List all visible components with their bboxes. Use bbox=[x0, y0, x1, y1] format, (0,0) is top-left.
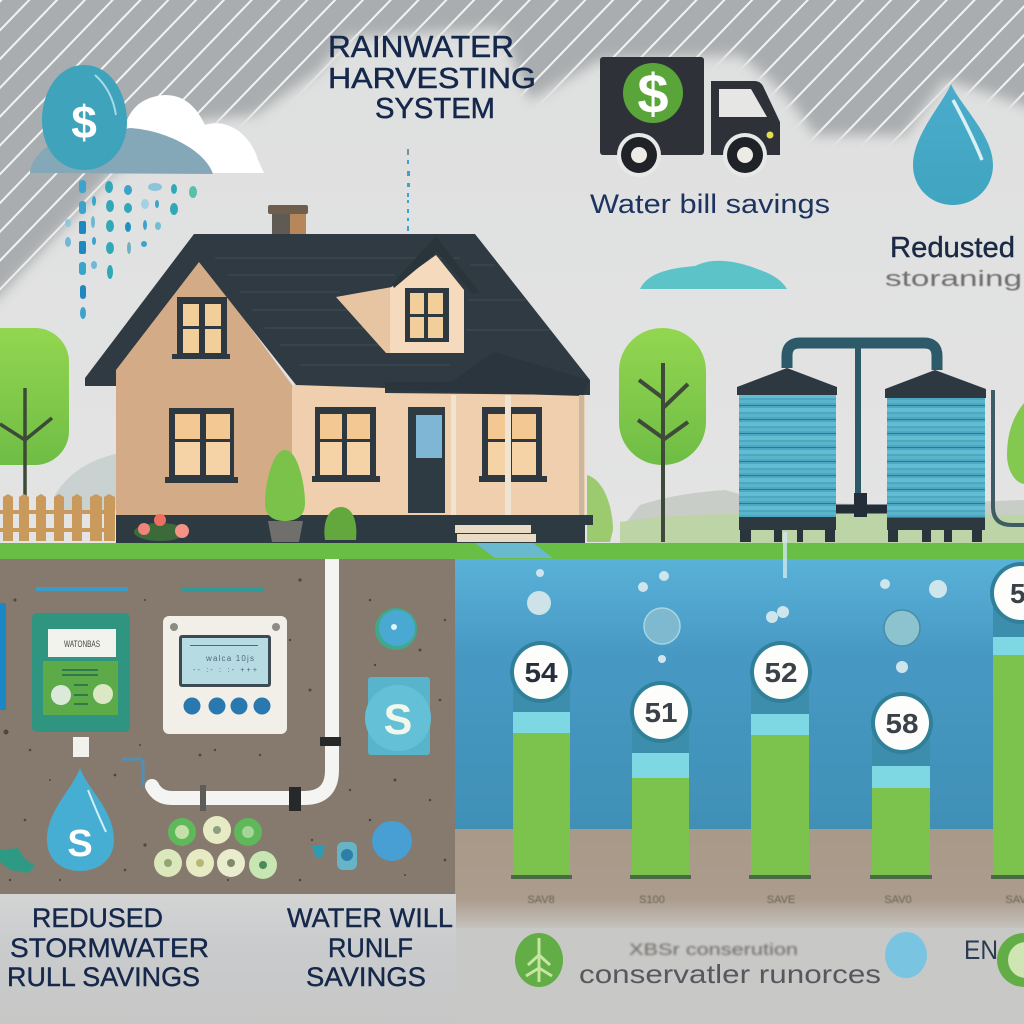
trickle from tank bbox=[783, 532, 787, 578]
legend: conservation: XBSr conserution bbox=[629, 940, 798, 959]
title bbox=[328, 29, 536, 125]
water path across lawn bbox=[475, 543, 553, 558]
legend: energy: EN bbox=[964, 935, 998, 965]
bar 3 bbox=[749, 641, 812, 879]
bar chart bbox=[510, 562, 1024, 906]
bar 4: 58 bbox=[886, 708, 918, 739]
title: HARVESTING bbox=[328, 63, 536, 95]
icon: truck with dollar bbox=[600, 57, 780, 177]
bottom band right bbox=[456, 928, 1024, 1024]
diagonal rain hatching bbox=[0, 0, 1024, 320]
soil panel bbox=[0, 558, 456, 894]
decorative top lines bbox=[0, 587, 263, 710]
bar labels: SAV0 bbox=[884, 894, 912, 906]
icon: green leaf bbox=[515, 933, 563, 987]
icon: cloud with dollar drop and rain bbox=[30, 65, 264, 319]
water panel bbox=[455, 558, 1024, 830]
rain drops bbox=[65, 180, 197, 319]
steps bbox=[455, 525, 536, 542]
bar 4 bbox=[870, 692, 933, 879]
upper gable window bbox=[172, 297, 230, 359]
icon: green leaf edge bbox=[997, 933, 1024, 987]
caption: reduced stormwater bbox=[7, 903, 209, 992]
icon: water drop bbox=[913, 84, 993, 205]
icon: dollar drop: $ bbox=[71, 96, 97, 148]
panel: green water meter: WATONBAS bbox=[64, 639, 100, 649]
bar labels: S100 bbox=[639, 894, 665, 906]
bar 2 bbox=[630, 681, 692, 879]
left gabled wall bbox=[116, 255, 292, 515]
label: water bill savings: Water bill savings bbox=[590, 189, 830, 219]
title: RAINWATER bbox=[328, 29, 514, 64]
legend: conservation: conservatler runorces bbox=[579, 959, 881, 989]
roof bbox=[85, 234, 590, 395]
window lower left bbox=[165, 408, 238, 483]
label: reduced stormwater: Redusted bbox=[890, 232, 1015, 264]
lawn strip bbox=[0, 543, 1024, 559]
porch columns bbox=[451, 395, 584, 515]
caption: reduced stormwater: STORMWATER bbox=[10, 933, 209, 963]
legend: energy bbox=[964, 933, 1024, 987]
hills and lawn backdrop bbox=[55, 453, 1024, 545]
flowers bbox=[134, 514, 189, 541]
caption: water will savings bbox=[287, 903, 453, 992]
bar 5 bbox=[990, 562, 1024, 879]
decorative teal mound bbox=[640, 261, 787, 289]
icon: teal water circle bbox=[375, 608, 417, 650]
bar labels: SAV8 bbox=[527, 894, 555, 906]
caption: reduced stormwater: RULL SAVINGS bbox=[7, 962, 200, 992]
dripping rain line bbox=[407, 149, 410, 231]
caption: water will savings: RUNLF bbox=[328, 933, 413, 963]
soil strip under water bbox=[455, 829, 1024, 929]
icon: small droplets bbox=[0, 821, 412, 873]
tree: middle bbox=[619, 328, 706, 542]
chimney bbox=[268, 205, 308, 236]
title: SYSTEM bbox=[375, 93, 495, 125]
icon: dollar pouch bbox=[365, 677, 431, 755]
panel: green water meter bbox=[32, 613, 130, 757]
icon: white drain pipe bbox=[122, 559, 341, 811]
tree: right edge bbox=[1007, 403, 1024, 484]
icon: truck with dollar: $ bbox=[637, 62, 669, 125]
icon: dollar drop bbox=[42, 65, 127, 170]
bar 1 bbox=[510, 641, 572, 879]
panel: digital controller: walca 10js bbox=[205, 654, 254, 663]
caption: water will savings: WATER WILL bbox=[287, 903, 453, 933]
caption: reduced stormwater: REDUSED bbox=[32, 903, 163, 933]
porch roof bbox=[385, 352, 589, 396]
fence bbox=[0, 494, 115, 541]
dormer bbox=[336, 236, 479, 353]
tank right bbox=[885, 370, 986, 542]
icon: dollar drop bbox=[47, 768, 114, 871]
roof shingle lines bbox=[215, 258, 550, 365]
bottom caption band bbox=[0, 894, 456, 1024]
icon: dollar pouch: S bbox=[384, 696, 412, 744]
small bush bbox=[324, 507, 356, 540]
bar 2: 51 bbox=[644, 697, 678, 728]
house bbox=[85, 205, 593, 543]
legend: conservation bbox=[515, 932, 927, 989]
label: reduced stormwater: storaning bbox=[885, 266, 1022, 291]
rising bubbles bbox=[527, 569, 947, 673]
bar 3: 52 bbox=[764, 657, 798, 688]
shrub in pot bbox=[265, 450, 305, 542]
tank left bbox=[737, 368, 837, 542]
icons: green filter discs bbox=[154, 816, 277, 879]
window middle bbox=[312, 407, 380, 482]
rain tanks and pipes bbox=[737, 343, 1024, 542]
door bbox=[408, 407, 445, 513]
soil speckles bbox=[4, 578, 446, 881]
panel: digital controller bbox=[163, 616, 287, 734]
bar 1: 54 bbox=[524, 657, 558, 688]
connecting pipes bbox=[787, 343, 1024, 525]
icon: dollar drop: S bbox=[67, 823, 93, 865]
right wall bbox=[290, 385, 585, 515]
icon: blue drop bbox=[885, 932, 927, 978]
panel: digital controller: -- :- : :- +++ bbox=[193, 667, 257, 674]
foundation bbox=[116, 515, 593, 543]
caption: water will savings: SAVINGS bbox=[306, 962, 426, 992]
label: reduced stormwater bbox=[885, 232, 1022, 291]
bar labels: SAVE bbox=[767, 894, 795, 906]
dormer window bbox=[405, 288, 449, 342]
bush behind porch bbox=[587, 475, 613, 542]
bar labels bbox=[527, 894, 1024, 906]
window right bbox=[479, 407, 547, 482]
tree: left bbox=[0, 328, 69, 500]
